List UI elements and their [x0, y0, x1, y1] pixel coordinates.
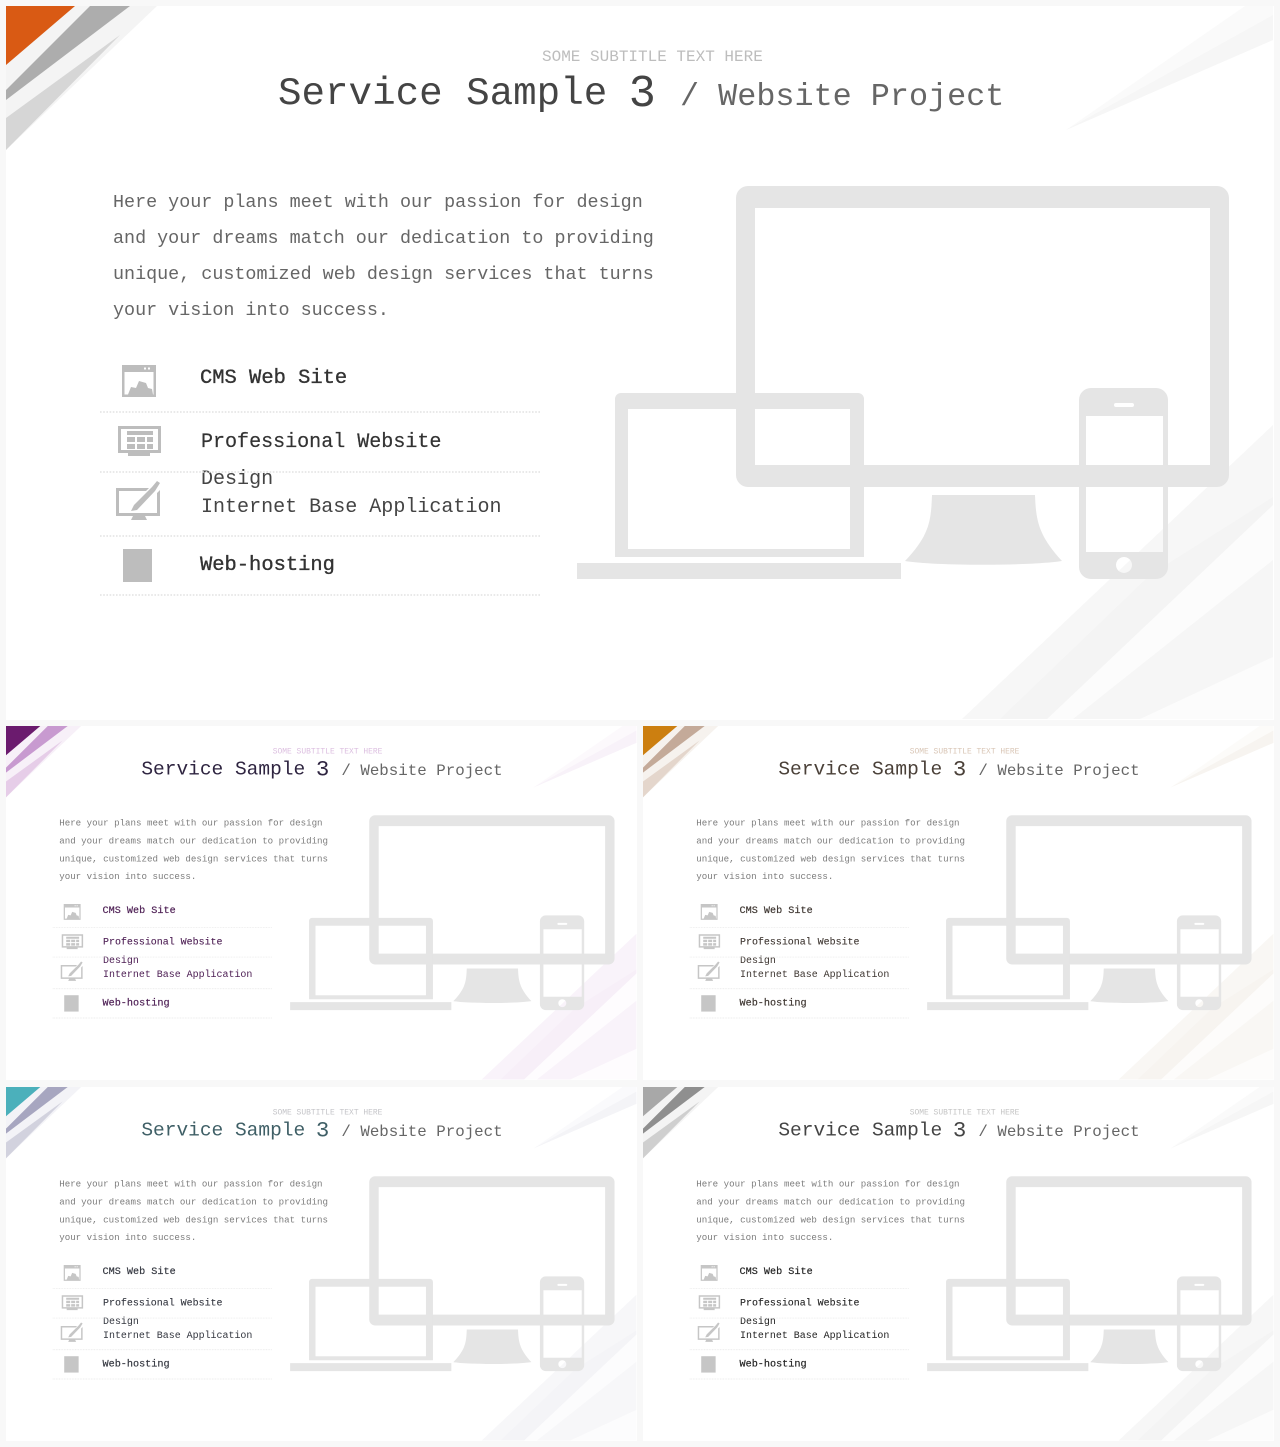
- intro paragraph: and your dreams match our dedication to providing: [59, 1197, 328, 1208]
- item: Professional Website Design: Professional Website: [201, 431, 441, 454]
- laptop: [577, 393, 901, 579]
- item: Professional Website Design: Professional Website: [103, 1298, 223, 1309]
- intro paragraph: [59, 1179, 328, 1243]
- intro paragraph: [113, 192, 654, 321]
- icon: web hosting square: [701, 1356, 716, 1373]
- intro paragraph: Here your plans meet with our passion for design: [113, 192, 643, 213]
- icon: website monitor: [118, 426, 161, 456]
- icon: monitor with pen: [698, 962, 720, 981]
- faint streak top-right: [533, 1087, 636, 1148]
- intro paragraph: your vision into success.: [113, 300, 389, 321]
- title: Service Sample: [278, 71, 607, 116]
- item: Internet Base Application: Internet Base Application: [103, 1330, 252, 1341]
- intro paragraph: unique, customized web design services that turns: [59, 853, 328, 864]
- intro paragraph: Here your plans meet with our passion for design: [696, 1179, 960, 1190]
- subtitle: SOME SUBTITLE TEXT HERE: [542, 48, 763, 66]
- faint stripes bottom-right: [1119, 934, 1273, 1080]
- item: Internet Base Application: Internet Base Application: [740, 1330, 889, 1341]
- icon: web hosting square: [123, 549, 152, 582]
- item: Professional Website Design: [103, 1298, 223, 1327]
- intro paragraph: your vision into success.: [696, 1232, 833, 1243]
- icon: website monitor: [699, 934, 720, 949]
- icon: monitor with pen: [61, 962, 83, 981]
- intro paragraph: unique, customized web design services that turns: [59, 1214, 328, 1225]
- item: Professional Website Design: Design: [103, 955, 139, 966]
- corner stripes top-left: [6, 726, 81, 797]
- title: 3: [953, 1118, 966, 1144]
- title: Service Sample: [141, 1120, 305, 1142]
- title suffix: / Website Project: [680, 79, 1004, 115]
- item: Internet Base Application: Internet Base Application: [740, 969, 889, 980]
- icon: website monitor: [62, 934, 83, 949]
- intro paragraph: and your dreams match our dedication to providing: [113, 228, 654, 249]
- device illustration: [927, 815, 1252, 1010]
- icon: CMS window: [701, 1265, 718, 1281]
- subtitle: SOME SUBTITLE TEXT HERE: [273, 747, 383, 756]
- title suffix: / Website Project: [978, 1123, 1140, 1141]
- item: Professional Website Design: [201, 431, 441, 491]
- title: Service Sample: [141, 759, 305, 781]
- device illustration: [577, 186, 1229, 579]
- intro paragraph: your vision into success.: [59, 871, 196, 882]
- title suffix: / Website Project: [978, 762, 1140, 780]
- subtitle: SOME SUBTITLE TEXT HERE: [910, 747, 1020, 756]
- icon: monitor with pen: [61, 1323, 83, 1342]
- item: Professional Website Design: Design: [201, 468, 273, 491]
- icon: website monitor: [62, 1295, 83, 1310]
- icon: website monitor: [699, 1295, 720, 1310]
- service list: [690, 904, 909, 1018]
- intro paragraph: and your dreams match our dedication to providing: [59, 836, 328, 847]
- faint stripes bottom-right: [482, 934, 636, 1080]
- item: Professional Website Design: Design: [740, 955, 776, 966]
- item: Web-hosting: Web-hosting: [103, 998, 170, 1010]
- corner stripes top-left: [643, 726, 718, 797]
- item: CMS Web Site: CMS Web Site: [103, 905, 176, 917]
- item: Web-hosting: Web-hosting: [103, 1359, 170, 1371]
- intro paragraph: [59, 818, 328, 882]
- faint streak top-right: [1170, 1087, 1273, 1148]
- icon: monitor with pen: [698, 1323, 720, 1342]
- intro paragraph: and your dreams match our dedication to providing: [696, 836, 965, 847]
- panel: grey theme slide: [643, 1087, 1274, 1441]
- service list: [690, 1265, 909, 1379]
- service list: [53, 904, 272, 1018]
- item: Web-hosting: Web-hosting: [740, 1359, 807, 1371]
- title: Service Sample: [778, 1120, 942, 1142]
- intro paragraph: unique, customized web design services that turns: [113, 264, 654, 285]
- title: 3: [316, 757, 329, 783]
- panel: purple theme slide: [6, 726, 637, 1080]
- title: 3: [629, 69, 656, 120]
- faint streak top-right: [1066, 6, 1273, 130]
- icon: CMS window: [701, 904, 718, 920]
- icon: web hosting square: [701, 995, 716, 1012]
- subtitle: SOME SUBTITLE TEXT HERE: [910, 1108, 1020, 1117]
- title suffix: / Website Project: [341, 762, 503, 780]
- item: Professional Website Design: [740, 937, 860, 966]
- item: Professional Website Design: [103, 937, 223, 966]
- item: CMS Web Site: CMS Web Site: [103, 1266, 176, 1278]
- item: Internet Base Application: Internet Base Application: [103, 969, 252, 980]
- panel: amber theme slide: [643, 726, 1274, 1080]
- item: Professional Website Design: Professional Website: [740, 1298, 860, 1309]
- intro paragraph: Here your plans meet with our passion for design: [59, 818, 323, 829]
- title: Service Sample: [778, 759, 942, 781]
- intro paragraph: [696, 818, 965, 882]
- icon: CMS window: [122, 365, 156, 397]
- faint stripes bottom-right: [962, 425, 1273, 719]
- intro paragraph: unique, customized web design services that turns: [696, 1214, 965, 1225]
- intro paragraph: your vision into success.: [59, 1232, 196, 1243]
- intro paragraph: unique, customized web design services that turns: [696, 853, 965, 864]
- icon: monitor with pen: [116, 481, 160, 520]
- phone: [1079, 388, 1168, 579]
- item: CMS Web Site: CMS Web Site: [740, 905, 813, 917]
- faint streak top-right: [533, 726, 636, 787]
- service list: [100, 365, 540, 595]
- item: Professional Website Design: Design: [103, 1316, 139, 1327]
- faint streak top-right: [1170, 726, 1273, 787]
- item: Professional Website Design: Design: [740, 1316, 776, 1327]
- item: Web-hosting: Web-hosting: [200, 554, 335, 577]
- device illustration: [290, 1176, 615, 1371]
- item: CMS Web Site: CMS Web Site: [740, 1266, 813, 1278]
- intro paragraph: and your dreams match our dedication to providing: [696, 1197, 965, 1208]
- corner stripes top-left: [6, 1087, 81, 1158]
- subtitle: SOME SUBTITLE TEXT HERE: [273, 1108, 383, 1117]
- intro paragraph: [696, 1179, 965, 1243]
- item: Web-hosting: Web-hosting: [740, 998, 807, 1010]
- corner stripes top-left: [6, 6, 157, 150]
- title suffix: / Website Project: [341, 1123, 503, 1141]
- intro paragraph: Here your plans meet with our passion for design: [59, 1179, 323, 1190]
- panel: main slide, orange theme: [6, 6, 1274, 720]
- faint stripes bottom-right: [1119, 1295, 1273, 1441]
- item: CMS Web Site: CMS Web Site: [200, 367, 347, 390]
- corner stripes top-left: [643, 1087, 718, 1158]
- panel: teal theme slide: [6, 1087, 637, 1441]
- icon: CMS window: [64, 904, 81, 920]
- icon: web hosting square: [64, 1356, 79, 1373]
- item: Professional Website Design: Professional Website: [103, 937, 223, 948]
- item: Internet Base Application: Internet Base Application: [201, 496, 502, 519]
- item: Professional Website Design: [740, 1298, 860, 1327]
- icon: CMS window: [64, 1265, 81, 1281]
- intro paragraph: your vision into success.: [696, 871, 833, 882]
- title: 3: [316, 1118, 329, 1144]
- faint stripes bottom-right: [482, 1295, 636, 1441]
- icon: web hosting square: [64, 995, 79, 1012]
- monitor stand: [905, 495, 1062, 565]
- item: Professional Website Design: Professional Website: [740, 937, 860, 948]
- monitor: [736, 186, 1229, 487]
- service list: [53, 1265, 272, 1379]
- intro paragraph: Here your plans meet with our passion for design: [696, 818, 960, 829]
- title: 3: [953, 757, 966, 783]
- device illustration: [927, 1176, 1252, 1371]
- device illustration: [290, 815, 615, 1010]
